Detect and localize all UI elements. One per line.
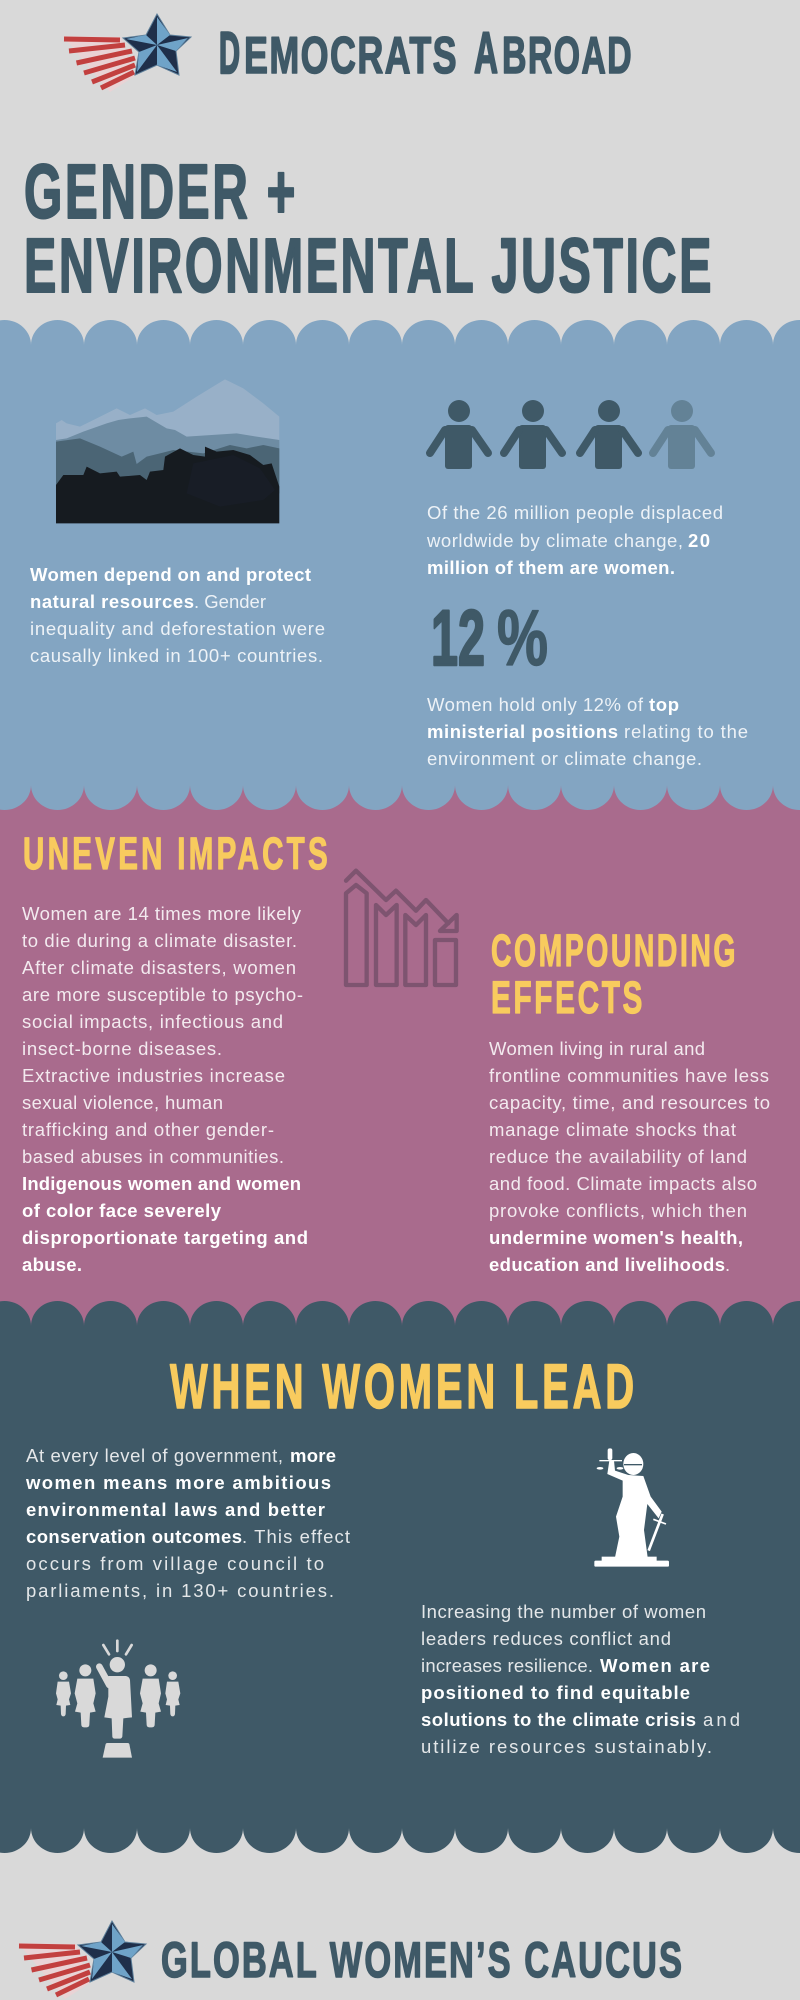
text block: more women: parliaments, in 130+ countries. — [26, 1580, 334, 1601]
text block: more women: more — [290, 1445, 336, 1466]
text block: ministerial positions — [427, 694, 748, 769]
text block: uneven impacts: Extractive industries increase — [22, 1065, 285, 1086]
icon: star and stripes logo — [63, 14, 191, 92]
text block: more women: women means more ambitious — [25, 1472, 331, 1493]
text block: compounding effects: . — [725, 1254, 730, 1275]
text block: natural resources — [30, 564, 325, 666]
footer: Global Women's Caucus — [18, 1921, 684, 1999]
text block: ministerial positions: environment or climate change. — [427, 748, 702, 769]
text block: displaced people: 20 — [688, 530, 710, 551]
text block: natural resources: inequality and deforestation were — [30, 618, 325, 639]
heading: Democrats Abroad: A — [474, 21, 498, 86]
text block: displaced people: worldwide by climate change, — [426, 530, 683, 551]
text block: more women: conservation outcomes — [26, 1526, 242, 1547]
text block: displaced people: Of the 26 million people displaced — [427, 502, 723, 523]
text block: uneven impacts: trafficking and other gender- — [22, 1119, 274, 1140]
text block: natural resources: Women depend on and protect — [30, 564, 311, 585]
icon: declining bar chart — [346, 871, 457, 985]
text block: women leaders: increases resilience. — [421, 1655, 593, 1676]
text block: more women: occurs from village council to — [26, 1553, 324, 1574]
icon: forest landscape — [56, 379, 279, 523]
icon: lady justice statue — [594, 1448, 669, 1567]
panel: uneven impacts and compounding effects — [0, 770, 800, 1340]
text block: compounding effects: manage climate shocks that — [489, 1119, 736, 1140]
text block: compounding effects: provoke conflicts, which then — [489, 1200, 747, 1221]
panel: blue facts — [0, 320, 800, 810]
text block: displaced people: million of them are women. — [427, 557, 675, 578]
stat: 12%: % — [497, 593, 548, 682]
text block: uneven impacts: abuse. — [22, 1254, 82, 1275]
text block: ministerial positions: top — [649, 694, 679, 715]
text block: uneven impacts: Women are 14 times more likely — [22, 903, 302, 924]
heading: Democrats Abroad: BROAD — [502, 27, 633, 85]
text block: ministerial positions: ministerial positions — [427, 721, 618, 742]
heading: uneven impacts: UNEVEN IMPACTS — [23, 828, 331, 879]
text block: uneven impacts: disproportionate targeting and — [22, 1227, 308, 1248]
text block: ministerial positions: Women hold only 12% of — [427, 694, 644, 715]
text block: uneven impacts: Indigenous women and women — [22, 1173, 301, 1194]
text block: more women: . This effect — [242, 1526, 350, 1547]
text block: compounding effects: reduce the availability of land — [489, 1146, 747, 1167]
text block: women leaders: solutions to the climate crisis — [421, 1709, 696, 1730]
text block: women leaders: utilize resources sustainably. — [421, 1736, 712, 1757]
text block: compounding effects: and food. Climate impacts also — [489, 1173, 757, 1194]
text block: compounding effects: education and livelihoods — [489, 1254, 725, 1275]
text block: women leaders: positioned to find equitable — [421, 1682, 690, 1703]
text block: compounding effects: Women living in rural and — [489, 1038, 705, 1059]
icon: woman leader with group — [56, 1641, 180, 1758]
text block: women leaders: and — [703, 1709, 740, 1730]
text block: uneven impacts: based abuses in communities. — [22, 1146, 284, 1167]
text block: uneven impacts: to die during a climate disaster. — [22, 930, 297, 951]
stat: 12%: 12 — [431, 593, 485, 682]
icon: four people — [430, 400, 711, 469]
icon: star and stripes logo — [18, 1921, 146, 1999]
heading: Democrats Abroad: D — [219, 21, 240, 86]
text block: women leaders: leaders reduces conflict and — [421, 1628, 671, 1649]
text block: uneven impacts: insect-borne diseases. — [22, 1038, 222, 1059]
text block: uneven impacts: social impacts, infectious and — [22, 1011, 283, 1032]
heading: Democrats Abroad — [219, 21, 633, 86]
heading: compounding effects — [491, 925, 738, 1023]
title — [24, 149, 714, 309]
text block: natural resources: causally linked in 100+ countries. — [30, 645, 323, 666]
text block: more women: environmental laws and better — [26, 1499, 325, 1520]
text block: uneven impacts: sexual violence, human — [22, 1092, 223, 1113]
text block: women leaders — [421, 1601, 740, 1757]
heading: compounding effects: EFFECTS — [491, 972, 645, 1023]
text block: compounding effects: undermine women's health, — [489, 1227, 743, 1248]
text block: uneven impacts: After climate disasters, women — [22, 957, 296, 978]
text block: natural resources: . Gender — [194, 591, 266, 612]
text block: compounding effects: capacity, time, and resources to — [489, 1092, 770, 1113]
text block: women leaders: Increasing the number of women — [421, 1601, 706, 1622]
text block: compounding effects — [489, 1038, 770, 1275]
text block: uneven impacts — [22, 903, 308, 1275]
panel: when women lead — [0, 1301, 800, 1853]
title: GENDER + — [24, 149, 298, 235]
text block: uneven impacts: are more susceptible to psycho- — [22, 984, 303, 1005]
text block: compounding effects: frontline communities have less — [489, 1065, 769, 1086]
heading: Democrats Abroad: EMOCRATS — [244, 27, 458, 85]
text block: ministerial positions: relating to the — [624, 721, 748, 742]
text block: women leaders: Women are — [600, 1655, 710, 1676]
header: Democrats Abroad — [63, 14, 633, 92]
text block: more women: At every level of government, — [26, 1445, 283, 1466]
text block: more women — [25, 1445, 350, 1601]
text block: displaced people — [426, 502, 723, 578]
text block: uneven impacts: of color face severely — [22, 1200, 222, 1221]
text block: natural resources: natural resources — [30, 591, 194, 612]
